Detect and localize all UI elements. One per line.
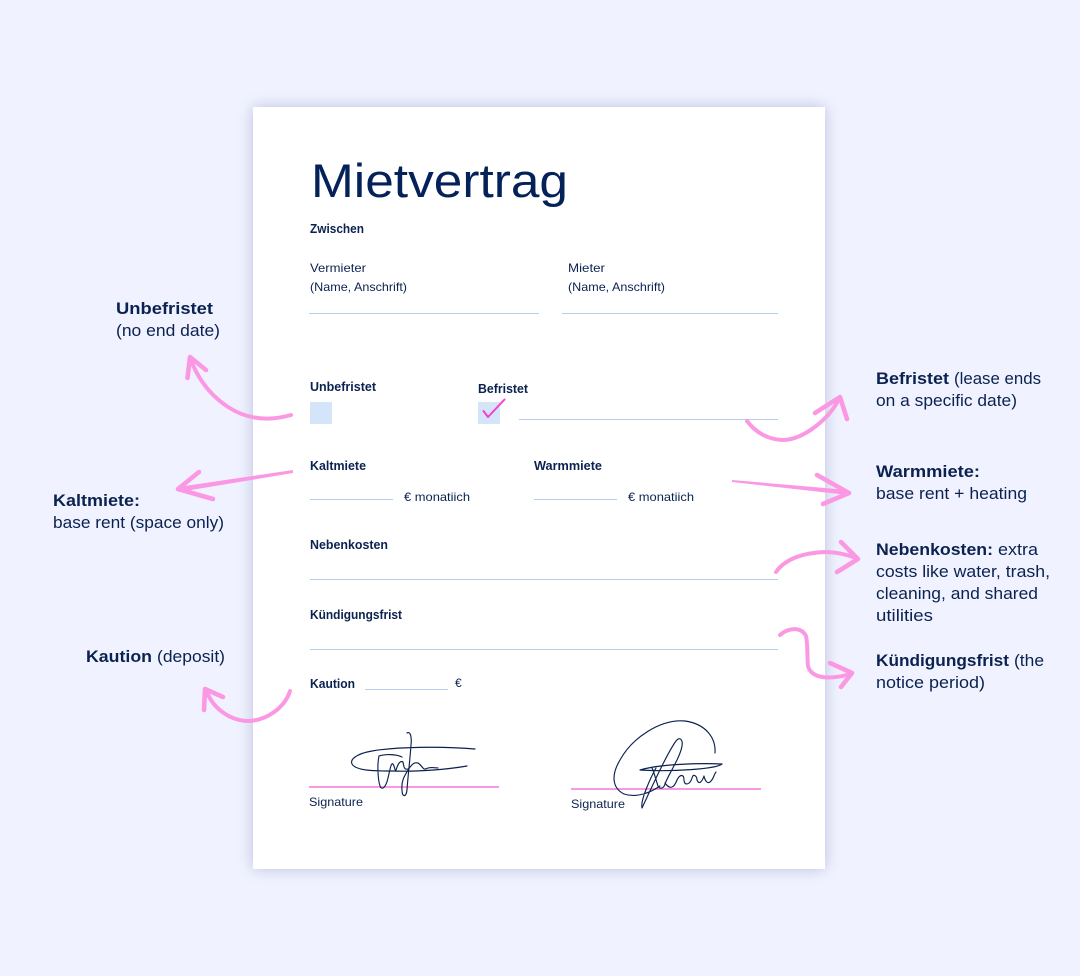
arrow: to Kaution note bbox=[204, 689, 290, 721]
note: Befristet: (lease ends bbox=[954, 370, 1041, 388]
field: Kündigungsfrist: Kündigungsfrist bbox=[310, 608, 403, 622]
arrow: to Nebenkosten note bbox=[776, 542, 858, 572]
note: Warmmiete bbox=[876, 463, 1027, 503]
field: Vermieter: Vermieter bbox=[310, 261, 366, 275]
note: Befristet: on a specific date) bbox=[876, 392, 1017, 410]
signature block: right bbox=[571, 721, 761, 811]
note: Befristet: Befristet bbox=[876, 370, 950, 388]
note: Kündigungsfrist bbox=[876, 652, 1044, 692]
note: Kaltmiete: Kaltmiete: bbox=[53, 492, 140, 510]
note: Nebenkosten: costs like water, trash, bbox=[876, 563, 1050, 581]
note: Kaution: (deposit) bbox=[157, 648, 225, 666]
field: Warmmiete: € monatiich bbox=[628, 490, 694, 504]
field: Kaltmiete bbox=[310, 459, 470, 504]
field: Mieter bbox=[562, 261, 778, 314]
title: Mietvertrag bbox=[311, 155, 568, 208]
note: Nebenkosten: extra bbox=[998, 541, 1039, 559]
field: Kaltmiete: € monatiich bbox=[404, 490, 470, 504]
note: Kündigungsfrist: (the bbox=[1014, 652, 1044, 670]
note: Nebenkosten: cleaning, and shared bbox=[876, 585, 1038, 603]
note: Warmmiete: base rent + heating bbox=[876, 485, 1027, 503]
note: Unbefristet: Unbefristet bbox=[116, 300, 214, 318]
field: Nebenkosten: Nebenkosten bbox=[310, 538, 388, 552]
note: Unbefristet: (no end date) bbox=[116, 322, 220, 340]
arrow: to Befristet note bbox=[747, 397, 847, 440]
note: Nebenkosten: utilities bbox=[876, 607, 933, 625]
field: Kaution: € bbox=[455, 676, 462, 690]
note: Unbefristet bbox=[116, 300, 220, 340]
note: Warmmiete: Warmmiete: bbox=[876, 463, 980, 481]
field: Befristet checkbox: Befristet bbox=[478, 382, 529, 396]
panel: lease document sheet bbox=[253, 107, 825, 869]
note: Kaution: Kaution bbox=[86, 648, 152, 666]
signature scribble: right bbox=[614, 721, 722, 808]
note: Kündigungsfrist: Kündigungsfrist bbox=[876, 652, 1010, 670]
note: Befristet bbox=[876, 370, 1041, 410]
note: Nebenkosten: Nebenkosten: bbox=[876, 541, 993, 559]
field: Unbefristet checkbox: Unbefristet bbox=[310, 380, 377, 394]
signature block: left bbox=[309, 733, 499, 809]
note: Nebenkosten bbox=[876, 541, 1050, 625]
signature block: left: Signature bbox=[309, 795, 363, 809]
field: Mieter: (Name, Anschrift) bbox=[568, 280, 665, 294]
field: Unbefristet checkbox bbox=[310, 380, 377, 424]
arrow: to Kaltmiete note bbox=[178, 470, 293, 499]
arrow: to Unbefristet note bbox=[188, 357, 291, 419]
label: Zwischen: Zwischen bbox=[310, 222, 364, 236]
arrow: to Warmmiete note bbox=[732, 475, 849, 504]
field: Warmmiete: Warmmiete bbox=[534, 459, 602, 473]
signature block: right: Signature bbox=[571, 797, 625, 811]
note: Kündigungsfrist: notice period) bbox=[876, 674, 985, 692]
field: Kaution bbox=[310, 676, 462, 691]
note: Kaltmiete: base rent (space only) bbox=[53, 514, 224, 532]
arrow: to Kündigungsfrist note bbox=[780, 629, 852, 687]
signature scribble: left bbox=[352, 733, 475, 796]
field: Mieter: Mieter bbox=[568, 261, 605, 275]
field: Warmmiete bbox=[534, 459, 694, 504]
field: Befristet checkbox bbox=[478, 382, 778, 424]
field: Vermieter bbox=[309, 261, 539, 314]
field: Kaution: Kaution bbox=[310, 677, 355, 691]
icon: checkmark bbox=[484, 400, 504, 417]
note: Kaution bbox=[86, 648, 225, 666]
note: Kaltmiete bbox=[53, 492, 224, 532]
field: Kaltmiete: Kaltmiete bbox=[310, 459, 366, 473]
field: Vermieter: (Name, Anschrift) bbox=[310, 280, 407, 294]
